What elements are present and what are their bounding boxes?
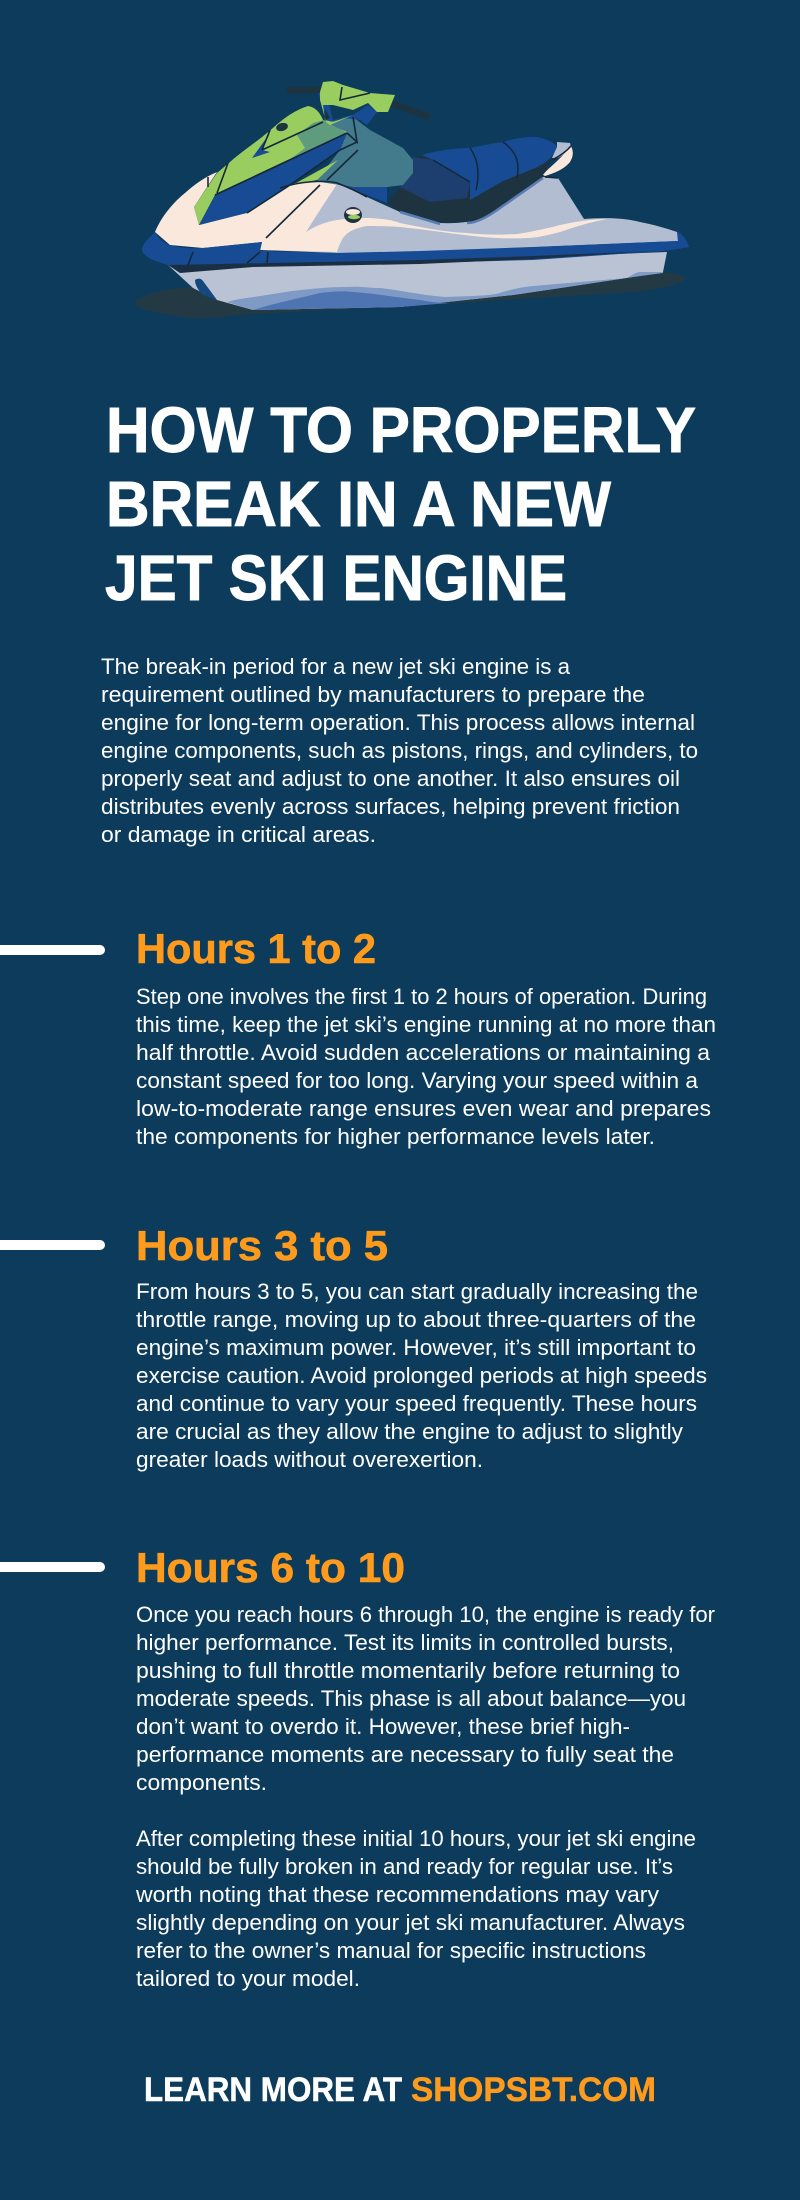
steering blue <box>318 92 377 125</box>
bow intake <box>195 279 217 300</box>
intro paragraph: distributes evenly across surfaces, helping prevent friction <box>101 794 680 819</box>
heading: Hours 1 to 2 <box>136 925 376 972</box>
seat stitching <box>433 142 518 190</box>
closing paragraph: refer to the owner’s manual for specific instructions <box>136 1938 646 1963</box>
steering shadow <box>325 108 330 120</box>
linework <box>188 87 370 265</box>
upper deck <box>262 177 678 253</box>
title: HOW TO PROPERLY <box>106 394 696 466</box>
hood teal patch <box>292 120 347 158</box>
title: JET SKI ENGINE <box>105 542 567 614</box>
hull reflection light <box>227 272 663 310</box>
body text: low-to-moderate range ensures even wear and prepares <box>136 1096 711 1121</box>
console <box>317 117 413 187</box>
seat top <box>422 137 557 200</box>
hull reflection dark <box>253 291 450 310</box>
heading: Hours 6 to 10 <box>136 1544 405 1591</box>
hood green <box>194 106 347 225</box>
closing paragraph: tailored to your model. <box>136 1966 360 1991</box>
body text: the components for higher performance levels later. <box>136 1124 655 1149</box>
body text <box>136 984 716 1149</box>
marker bar <box>0 1562 105 1572</box>
steering green <box>320 81 395 125</box>
hood vent <box>252 133 270 158</box>
intro paragraph: engine components, such as pistons, rings, and cylinders, to <box>101 738 698 763</box>
closing paragraph: slightly depending on your jet ski manufacturer. Always <box>136 1910 685 1935</box>
body text: performance moments are necessary to fully seat the <box>136 1742 674 1767</box>
handlebars <box>290 90 427 116</box>
intro paragraph: engine for long-term operation. This process allows internal <box>101 710 695 735</box>
body text: pushing to full throttle momentarily before returning to <box>136 1658 680 1683</box>
title <box>105 394 696 614</box>
intro paragraph: requirement outlined by manufacturers to prepare the <box>101 682 645 707</box>
call to action: LEARN MORE AT <box>144 2071 402 2109</box>
body text: components. <box>136 1770 267 1795</box>
seat front panel <box>400 157 470 202</box>
cream deck panel <box>155 172 607 252</box>
seat highlight edge <box>400 178 543 224</box>
body text: constant speed for too long. Varying your speed within a <box>136 1068 699 1093</box>
body text: and continue to vary your speed frequently. These hours <box>136 1391 697 1416</box>
body text: engine’s maximum power. However, it’s still important to <box>136 1335 696 1360</box>
panel: hours 3 to 5 <box>0 1222 707 1472</box>
intro paragraph: or damage in critical areas. <box>101 822 376 847</box>
seat base <box>387 147 557 223</box>
closing paragraph: worth noting that these recommendations may vary <box>135 1882 659 1907</box>
body text: From hours 3 to 5, you can start gradually increasing the <box>136 1279 698 1304</box>
body text: exercise caution. Avoid prolonged periods at high speeds <box>136 1363 707 1388</box>
heading: Hours 3 to 5 <box>136 1222 388 1269</box>
title: BREAK IN A NEW <box>106 468 612 540</box>
water shadow <box>135 272 685 318</box>
hood vent eye <box>275 122 289 132</box>
illustration: jet ski <box>135 81 689 318</box>
body text: Step one involves the first 1 to 2 hours of operation. During <box>136 984 707 1009</box>
closing paragraph: should be fully broken in and ready for regular use. It’s <box>136 1854 673 1879</box>
body text: moderate speeds. This phase is all about balance—you <box>136 1686 686 1711</box>
panel: hours 1 to 2 <box>0 925 716 1149</box>
marker bar <box>0 1240 105 1250</box>
console blue curve <box>337 184 387 203</box>
deck badge <box>344 207 362 223</box>
body text <box>136 1602 715 1795</box>
body text: higher performance. Test its limits in controlled bursts, <box>136 1630 674 1655</box>
lower hull <box>168 252 667 310</box>
panel: hours 6 to 10 <box>0 1544 715 1795</box>
marker bar <box>0 945 105 955</box>
body text: Once you reach hours 6 through 10, the engine is ready for <box>136 1602 715 1627</box>
rear cowl <box>552 142 570 158</box>
call to action <box>144 2071 656 2109</box>
closing paragraph: After completing these initial 10 hours, your jet ski engine <box>136 1826 696 1851</box>
console green flash <box>287 160 338 188</box>
body text <box>136 1279 707 1472</box>
body text: greater loads without overexertion. <box>136 1447 483 1472</box>
body text: this time, keep the jet ski’s engine running at no more than <box>136 1012 716 1037</box>
body text: don’t want to overdo it. However, these brief high- <box>136 1714 630 1739</box>
intro paragraph: The break-in period for a new jet ski engine is a <box>101 654 571 679</box>
body text: throttle range, moving up to about three-quarters of the <box>136 1307 696 1332</box>
intro paragraph <box>101 654 698 847</box>
closing paragraph <box>135 1826 696 1991</box>
hood blue stripe <box>199 133 347 225</box>
call to action: SHOPSBT.COM <box>411 2071 656 2109</box>
gunwale band <box>142 231 689 265</box>
body text: half throttle. Avoid sudden accelerations or maintaining a <box>136 1040 711 1065</box>
intro paragraph: properly seat and adjust to one another. It also ensures oil <box>101 766 680 791</box>
body text: are crucial as they allow the engine to adjust to slightly <box>136 1419 683 1444</box>
hull seam <box>168 251 653 273</box>
